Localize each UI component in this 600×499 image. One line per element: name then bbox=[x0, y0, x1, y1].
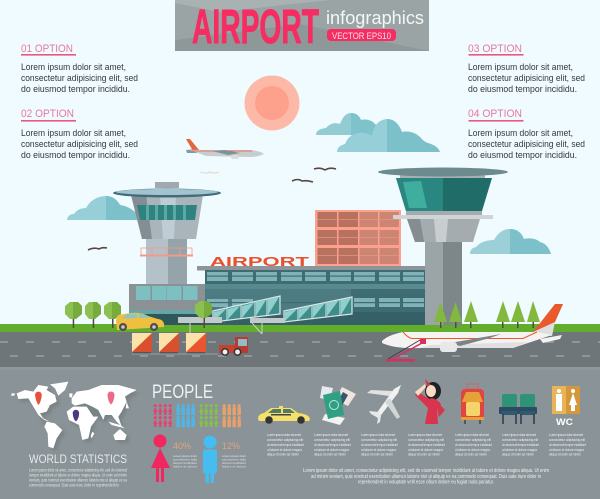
icon: sun bbox=[244, 76, 300, 130]
icon captions: Lorem ipsum dolor sit amet bbox=[502, 433, 536, 437]
people heading: PEOPLE bbox=[152, 382, 213, 403]
woman text bbox=[173, 454, 197, 468]
birds bbox=[88, 168, 336, 250]
woman text: labore et dolore bbox=[173, 464, 197, 468]
flying airplane bbox=[186, 139, 264, 159]
option 04: 04 OPTION bbox=[468, 108, 522, 120]
icon captions: consectetur adipisicing elit bbox=[314, 438, 350, 442]
bottom panel bbox=[0, 370, 600, 499]
terminal sign: AIRPORT bbox=[210, 254, 309, 269]
pine trees bbox=[434, 301, 540, 328]
woman text: consectetur adip bbox=[173, 458, 197, 462]
world statistics heading: WORLD STATISTICS bbox=[29, 452, 127, 466]
world map bbox=[11, 382, 140, 451]
woman text: tempor incididunt bbox=[173, 461, 197, 465]
icon: passport and tickets bbox=[320, 386, 356, 425]
icon: airport seats bbox=[499, 394, 537, 424]
deciduous trees bbox=[65, 301, 212, 328]
man text: Lorem ipsum dolor bbox=[222, 454, 246, 458]
baggage carts bbox=[132, 333, 218, 354]
icon captions: consectetur adipisicing elit bbox=[455, 438, 491, 442]
option 01: consectetur adipisicing elit, sed bbox=[21, 73, 138, 84]
title banner: infographics bbox=[326, 8, 424, 28]
option 03: 03 OPTION bbox=[468, 43, 522, 55]
icon captions: ut labore et dolore magna bbox=[361, 448, 396, 452]
option 02: do eiusmod tempor incididu. bbox=[21, 150, 130, 161]
icon captions: aliqua Ut enim ad minim bbox=[267, 452, 299, 456]
icon captions: ut labore et dolore magna bbox=[267, 448, 302, 452]
icon captions: aliqua Ut enim ad minim bbox=[502, 452, 534, 456]
cloud: behind left tower bbox=[67, 196, 142, 220]
icon captions: consectetur adipisicing elit bbox=[502, 438, 538, 442]
man text bbox=[222, 454, 246, 468]
icon: flight attendant bbox=[415, 379, 445, 424]
option 04: Lorem ipsum dolor sit amet, bbox=[468, 128, 573, 139]
option 04: do eiusmod tempor incididu. bbox=[468, 150, 577, 161]
woman percentage: 40% bbox=[173, 441, 191, 451]
icon captions: ut labore et dolore magna bbox=[314, 448, 349, 452]
option 02: consectetur adipisicing elit, sed bbox=[21, 139, 138, 150]
option 03: do eiusmod tempor incididu. bbox=[468, 84, 577, 95]
world statistics text: Lorem ipsum dolor sit amet, consectetur adipisicing elit, sed do eiusmod bbox=[29, 468, 127, 472]
icon captions: do eiusmod tempor incididunt bbox=[549, 443, 586, 447]
world statistics text bbox=[29, 468, 128, 488]
left tower base bbox=[129, 284, 205, 325]
yellow car bbox=[116, 313, 164, 331]
option 04: consectetur adipisicing elit, sed bbox=[468, 139, 585, 150]
icon captions: aliqua Ut enim ad minim bbox=[314, 452, 346, 456]
bottom paragraph bbox=[303, 468, 549, 486]
icon captions: do eiusmod tempor incididunt bbox=[361, 443, 398, 447]
icon captions: do eiusmod tempor incididunt bbox=[408, 443, 445, 447]
terminal building bbox=[197, 266, 425, 325]
icon captions: Lorem ipsum dolor sit amet bbox=[267, 433, 301, 437]
world statistics text: veniam, quis nostrud exercitation ullamco laboris nisi ut aliquip ex ea bbox=[29, 478, 128, 482]
icon captions: Lorem ipsum dolor sit amet bbox=[408, 433, 442, 437]
map pins bbox=[35, 392, 114, 422]
icon captions: ut labore et dolore magna bbox=[408, 448, 443, 452]
icon captions bbox=[267, 433, 586, 456]
icon captions: aliqua Ut enim ad minim bbox=[549, 452, 581, 456]
man text: consectetur adip bbox=[222, 458, 246, 462]
title banner: AIRPORT bbox=[192, 1, 319, 54]
man text: tempor incididunt bbox=[222, 461, 246, 465]
jet bridges bbox=[178, 296, 352, 334]
option 02: Lorem ipsum dolor sit amet, bbox=[21, 128, 126, 139]
icon captions: aliqua Ut enim ad minim bbox=[455, 452, 487, 456]
pink office building bbox=[315, 210, 401, 266]
icon captions: Lorem ipsum dolor sit amet bbox=[455, 433, 489, 437]
icon captions: aliqua Ut enim ad minim bbox=[361, 452, 393, 456]
world statistics text: tempor incididunt ut labore et dolore magna aliqua. Ut enim ad minim bbox=[29, 472, 127, 478]
world statistics text: commodo consequat. Duis aute irure dolor in reprehenderit in bbox=[29, 482, 120, 488]
man text: labore et dolore bbox=[222, 464, 246, 468]
icon: WC sign bbox=[552, 386, 580, 427]
icon captions: do eiusmod tempor incididunt bbox=[502, 443, 539, 447]
cloud: upper right front bbox=[337, 119, 440, 152]
people pictogram grid bbox=[153, 404, 242, 428]
option 01: Lorem ipsum dolor sit amet, bbox=[21, 62, 126, 73]
cloud: right of right tower bbox=[470, 229, 551, 254]
icon captions: Lorem ipsum dolor sit amet bbox=[549, 433, 583, 437]
icon captions: do eiusmod tempor incididunt bbox=[455, 443, 492, 447]
woman text: Lorem ipsum dolor bbox=[173, 454, 197, 458]
ground strip bbox=[0, 324, 600, 332]
icon captions: do eiusmod tempor incididunt bbox=[267, 443, 304, 447]
icon: woman bbox=[151, 434, 170, 482]
tug truck bbox=[219, 337, 248, 355]
option 02: 02 OPTION bbox=[21, 108, 74, 120]
bottom paragraph: ad minim veniam, quis nostrud exercitation ullamco laboris nisi ut aliquip ex ea commodo consequat. Duis aute irure dolor in bbox=[311, 474, 541, 480]
option 03 bbox=[468, 43, 585, 95]
option 01: do eiusmod tempor incididu. bbox=[21, 84, 130, 95]
bottom paragraph: reprehenderit in voluptate velit esse cillum dolore eu fugiat nulla pariatur. bbox=[358, 480, 494, 486]
icon captions: ut labore et dolore magna bbox=[455, 448, 490, 452]
bottom paragraph: Lorem ipsum dolor sit amet, consectetur adipisicing elit, sed do eiusmod tempor incididunt ut labore et dolore magna aliqua. Ut enim bbox=[303, 468, 549, 474]
icon captions: consectetur adipisicing elit bbox=[267, 438, 303, 442]
runway bbox=[0, 332, 600, 370]
icon: taxi bbox=[258, 406, 310, 424]
icon captions: consectetur adipisicing elit bbox=[408, 438, 444, 442]
option 03: Lorem ipsum dolor sit amet, bbox=[468, 62, 573, 73]
icon captions: consectetur adipisicing elit bbox=[361, 438, 397, 442]
icon captions: ut labore et dolore magna bbox=[549, 448, 584, 452]
left control tower bbox=[113, 182, 221, 285]
man percentage: 12% bbox=[222, 441, 240, 451]
icon captions: Lorem ipsum dolor sit amet bbox=[314, 433, 348, 437]
icon: man bbox=[203, 436, 217, 483]
parked airplane bbox=[382, 304, 563, 362]
icon: suitcase bbox=[461, 384, 484, 424]
icon captions: ut labore et dolore magna bbox=[502, 448, 537, 452]
icon: WC sign: WC bbox=[556, 417, 574, 427]
icon: airplane bbox=[367, 385, 401, 424]
icon captions: consectetur adipisicing elit bbox=[549, 438, 585, 442]
icon captions: Lorem ipsum dolor sit amet bbox=[361, 433, 395, 437]
cloud: upper right back bbox=[316, 113, 376, 135]
title banner: VECTOR EPS10 bbox=[332, 31, 391, 41]
option 01: 01 OPTION bbox=[21, 43, 73, 55]
option 01 bbox=[21, 43, 138, 95]
icon captions: do eiusmod tempor incididunt bbox=[314, 443, 351, 447]
icon captions: aliqua Ut enim ad minim bbox=[408, 452, 440, 456]
option 02 bbox=[21, 108, 138, 161]
option 04 bbox=[468, 108, 585, 161]
right control tower bbox=[378, 168, 508, 325]
option 03: consectetur adipisicing elit, sed bbox=[468, 73, 585, 84]
